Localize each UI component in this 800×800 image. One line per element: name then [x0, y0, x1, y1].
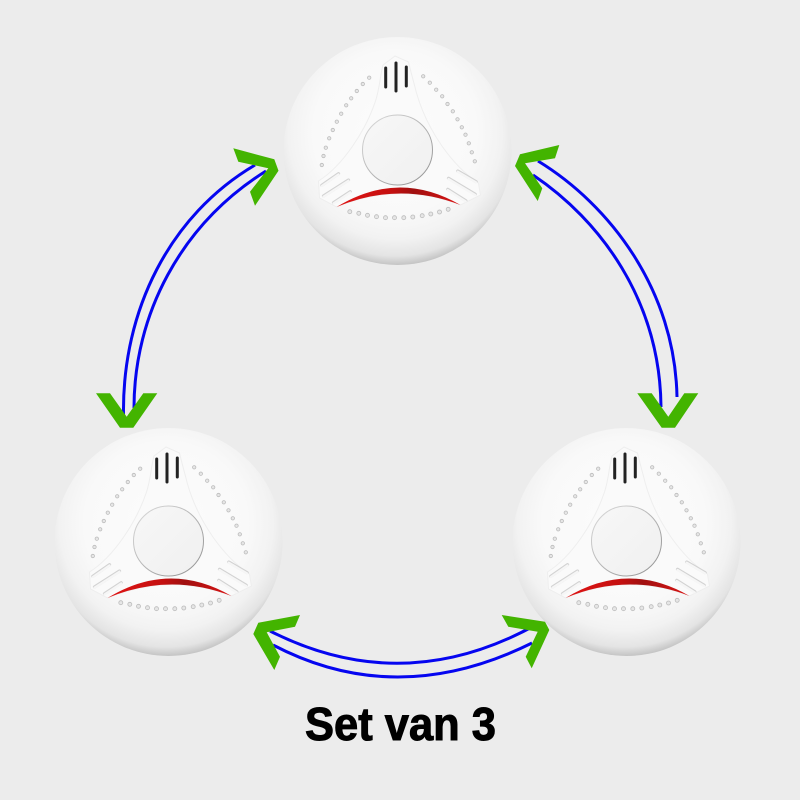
arrow: top to bottom left [96, 148, 278, 428]
caption: Set van 3 [305, 698, 496, 750]
arrow: bottom left to bottom right [253, 615, 549, 677]
detector: top [284, 37, 512, 265]
detector: bottom left [54, 428, 282, 656]
detector: bottom right [512, 428, 740, 656]
arrow: top to bottom right [515, 145, 698, 428]
